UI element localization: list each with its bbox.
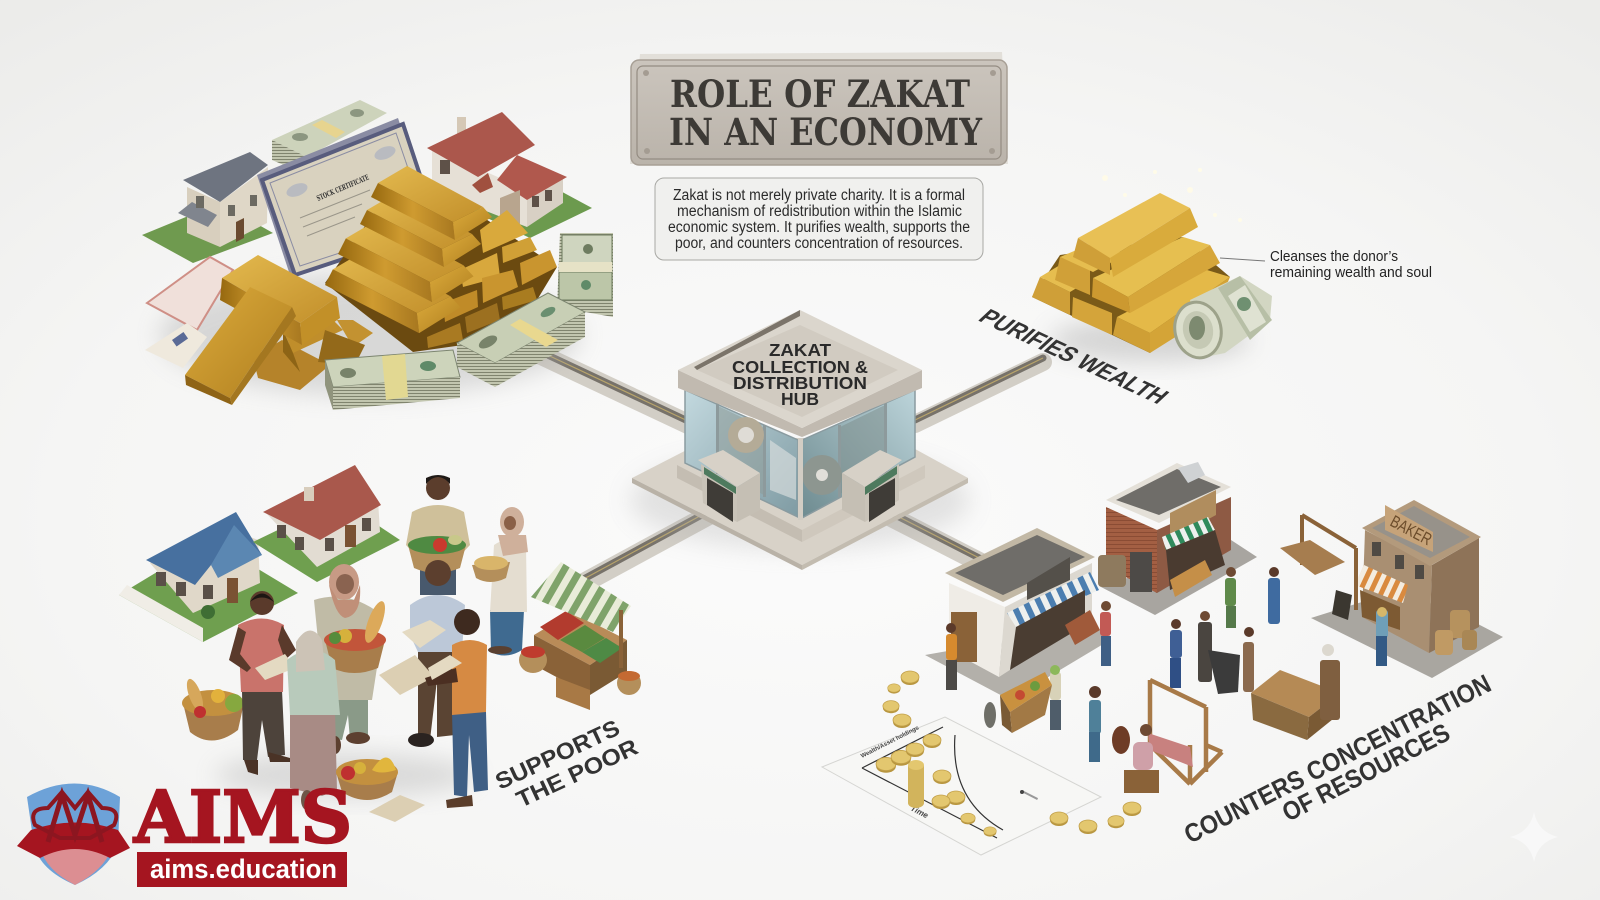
logo url: aims.education [150,854,337,884]
callout text: remaining wealth and soul [1270,264,1432,281]
person: man in orange shirt [425,609,488,808]
trail of coins [883,671,1141,834]
stock certificate [257,118,425,275]
gold stack [1032,193,1230,353]
portal: left [698,450,760,522]
portal: right [842,450,902,522]
house: red roof [427,112,592,238]
person: man with vegetable basket [406,475,470,595]
axis labels: Wealth/Asset holdings [860,725,921,760]
cash stack: behind certificate [272,100,387,175]
callout line [1220,258,1265,261]
hub text: ZAKAT [769,340,831,360]
base slab [632,438,968,565]
money roll [1170,276,1272,362]
logo shield [17,784,130,885]
basket: front [336,758,398,800]
zakat collection and distribution hub [630,310,970,570]
label: counters concentration: COUNTERS CONCENTRATION [1179,668,1496,849]
counters concentration group [925,462,1503,793]
label: purifies wealth: PURIFIES WEALTH [972,305,1174,409]
title text: ROLE OF ZAKAT [670,72,970,116]
plinth [677,465,802,542]
glass walls [685,390,798,517]
house: blue roof [119,512,298,642]
produce crate [984,672,1052,733]
intro text box: mechanism of redistribution within the Islamic [677,203,962,220]
basket: left [182,677,244,741]
small figures [946,567,1388,762]
person: man in red shirt [229,591,296,775]
person: woman with bread basket [472,507,528,656]
chart on paper: Time [909,804,930,820]
label: of resources: OF RESOURCES [1277,717,1455,827]
house: red roof [253,465,400,582]
cash stacks [325,233,613,410]
papers [145,257,233,368]
shop: brick [1098,462,1257,615]
weaver [1124,724,1193,793]
person: woman from behind [287,630,340,810]
loom [1150,680,1222,784]
coin stacks [908,765,924,803]
hub text: COLLECTION & [732,357,868,377]
wealth hoard: gold, cash, houses, certificates [142,100,613,410]
title text: IN AN ECONOMY [669,110,982,154]
title plaque [630,52,1008,165]
roof [678,370,922,437]
workshop table [1251,644,1340,740]
intro text box [655,178,983,260]
logo: AIMS [17,775,352,887]
intro text box: economic system. It purifies wealth, supports the [668,219,970,236]
callout text: Cleanses the donor’s [1270,248,1398,265]
supports the poor group [119,465,641,822]
intro text box: poor, and counters concentration of resources. [675,235,963,252]
label: supports the poor: SUPPORTS [491,714,624,795]
label: supports the poor line two: THE POOR [512,733,642,813]
person: man in blue shirt [402,560,465,747]
shop: baker [1280,500,1503,678]
stock certificate: STOCK CERTIFICATE [315,173,370,203]
logo url bar [137,852,347,887]
gold pile: left [185,255,373,405]
sparkle watermark [1510,812,1558,862]
intro text box: Zakat is not merely private charity. It is a formal [673,187,965,204]
envelopes on floor [369,795,425,822]
gold pyramid [325,166,557,352]
axes [862,727,997,838]
chart on paper [822,717,1101,855]
shop: blue awning [925,528,1110,700]
shadows [215,753,475,797]
shop: baker: BAKER [1387,512,1435,549]
hub text: HUB [781,389,819,409]
chart legend [1020,790,1038,800]
conveyors: four channels radiating from the hub [537,350,1043,585]
sparkles [1102,168,1242,222]
hub text: DISTRIBUTION [733,373,867,393]
logo wordmark: AIMS [133,775,352,859]
envelope [379,655,434,695]
market stall [519,562,641,710]
purifies wealth group: gold and rolled cash [1032,168,1432,362]
anvil [1208,650,1240,694]
barrel [1112,726,1130,754]
person: woman in hijab with basket [314,564,389,754]
house: grey roof [142,152,273,263]
